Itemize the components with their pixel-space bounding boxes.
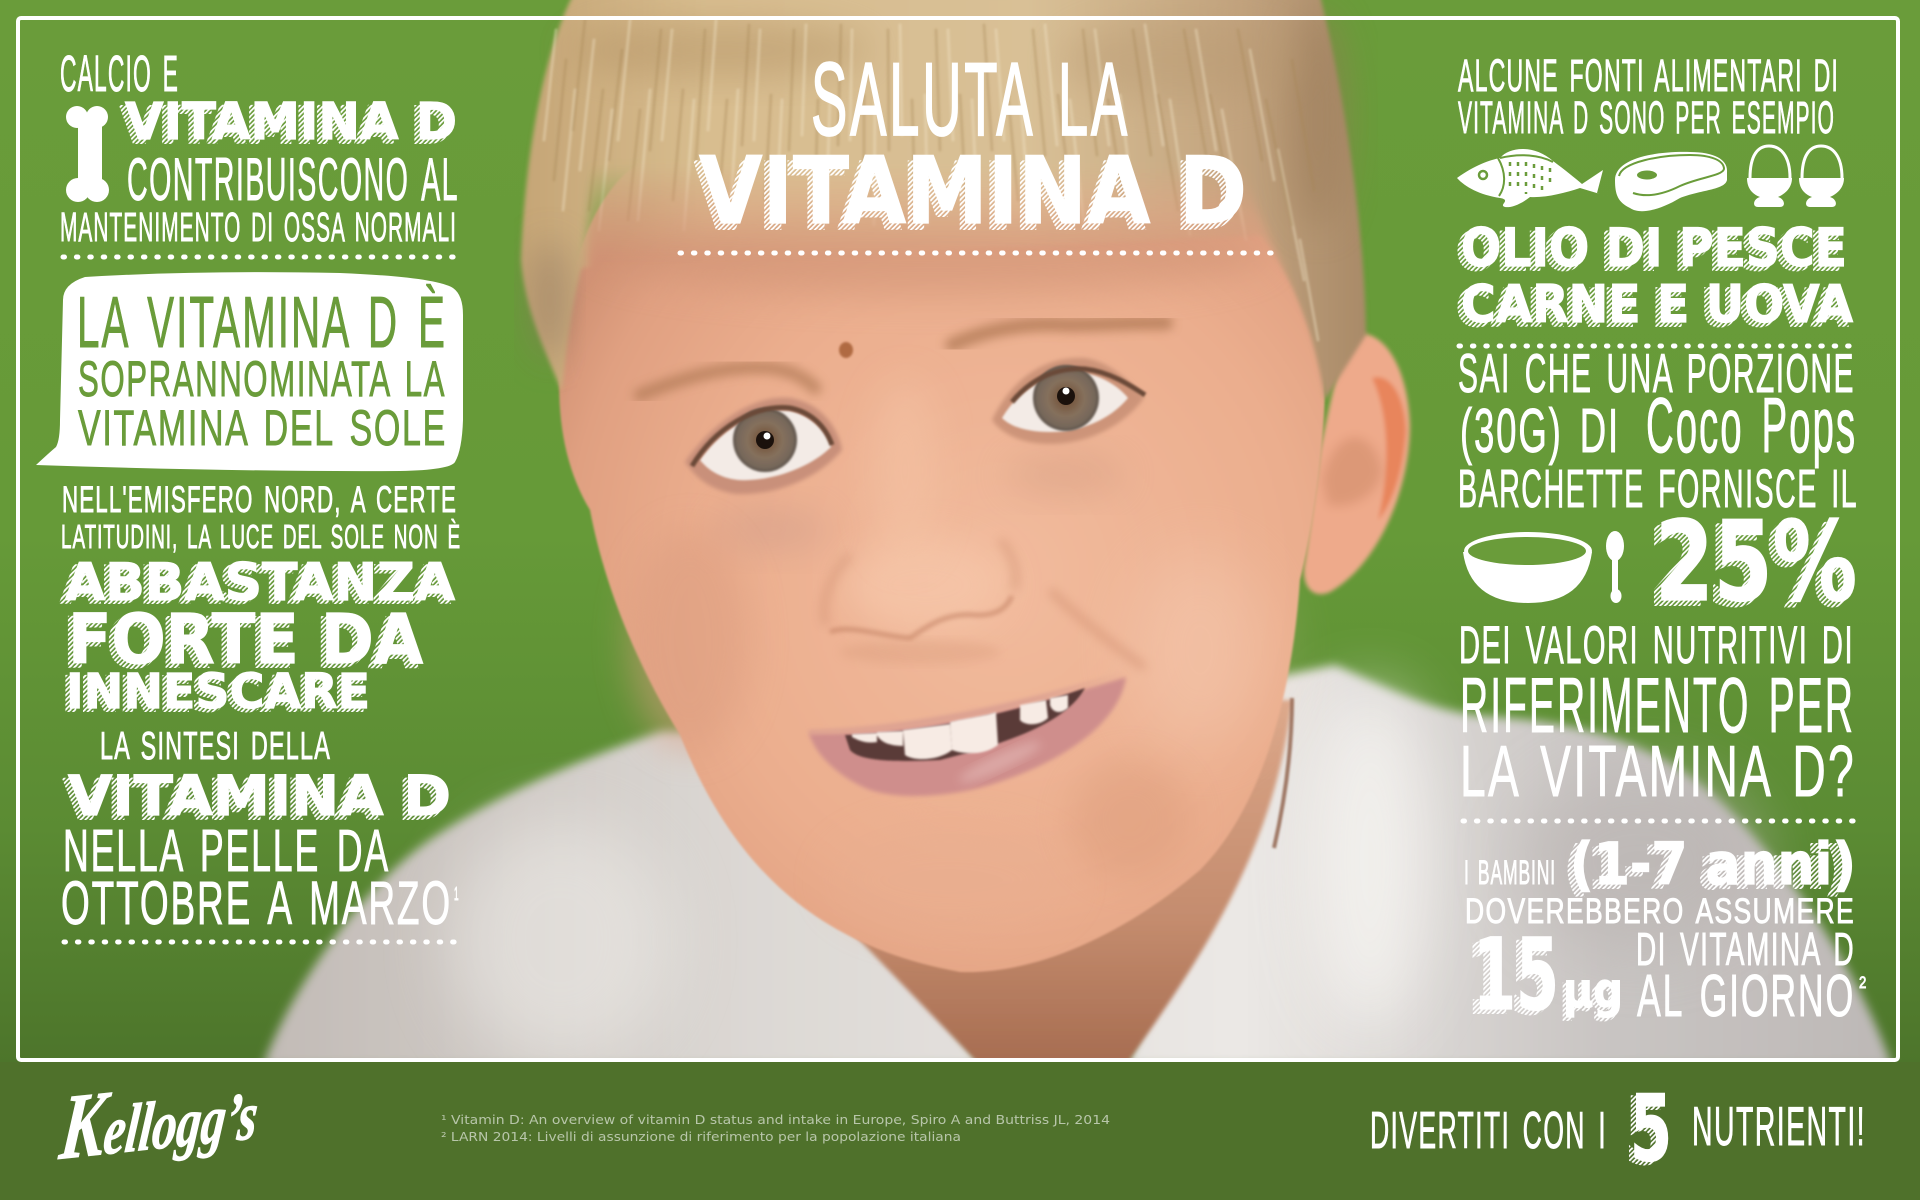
left column: northern hemisphere text: ABBASTANZA xyxy=(65,553,455,613)
text: CONTRIBUISCONO AL xyxy=(127,146,459,213)
heading: olio di pesce carne e uova xyxy=(1456,218,1853,339)
speech bubble xyxy=(36,272,463,471)
hair strands xyxy=(544,20,1318,340)
tagline: divertiti con i 5 nutrienti xyxy=(1370,1075,1866,1185)
right column: children intake text: 15 xyxy=(1466,922,1554,1037)
left column: northern hemisphere text: 1 xyxy=(454,884,459,904)
left column: northern hemisphere text: NELL'EMISFERO NORD, A CERTE xyxy=(62,479,457,520)
left column: bones text: CALCIO E xyxy=(60,45,179,102)
heading: olio di pesce carne e uova: OLIO DI PESCE xyxy=(1456,222,1842,283)
photo: face xyxy=(559,150,1325,972)
left column: bones text xyxy=(60,45,459,250)
photo: white t-shirt xyxy=(263,665,1892,1066)
left dotted divider 2 xyxy=(64,940,460,944)
title: saluta la vitamina d: VITAMINA D xyxy=(694,143,1242,251)
left column: northern hemisphere text: INNESCARE xyxy=(62,667,366,723)
left column: northern hemisphere text: NELLA PELLE DA xyxy=(63,818,390,884)
left column: northern hemisphere text: VITAMINA D xyxy=(63,768,446,832)
photo: right eyebrow xyxy=(952,323,1166,345)
icon: spoon xyxy=(1606,531,1624,603)
right dotted divider 2 xyxy=(1463,818,1856,824)
icon: eggs xyxy=(1747,146,1844,207)
photo: collar shadow line xyxy=(1274,698,1292,848)
footnotes: ¹ Vitamin D: An overview of vitamin D status and intake in Europe, Spiro A and Buttriss JL, 2014 xyxy=(441,1112,1110,1127)
photo: mouth xyxy=(809,672,1126,796)
heading: olio di pesce carne e uova: CARNE E UOVA xyxy=(1461,275,1853,335)
photo: hair xyxy=(521,0,1366,400)
speech bubble: LA VITAMINA D È xyxy=(77,283,447,363)
right dotted divider xyxy=(1459,344,1850,348)
left column: bones text: VITAMINA D xyxy=(120,97,452,156)
footnotes: ² LARN 2014: Livelli di assunzione di riferimento per la popolazione italiana xyxy=(441,1129,961,1144)
photo: left eye xyxy=(685,398,842,494)
lip highlight xyxy=(961,740,1039,784)
smile crease xyxy=(1050,590,1145,668)
speech bubble: VITAMINA DEL SOLE xyxy=(78,400,447,456)
right column: food sources text xyxy=(1458,50,1839,143)
left column: northern hemisphere text: VITAMINA D xyxy=(68,764,451,828)
photo: smiling blond boy xyxy=(263,0,1892,1066)
title: saluta la vitamina d: VITAMINA D xyxy=(699,137,1247,245)
photo: left eyebrow xyxy=(640,367,815,395)
left column: bones text: VITAMINA D xyxy=(125,93,457,152)
photo: mole xyxy=(839,342,853,358)
right column: children intake text: I BAMBINI xyxy=(1464,854,1556,892)
right column: children intake text: (1-7 anni) xyxy=(1570,830,1856,898)
right column: children intake text: 2 xyxy=(1859,973,1867,992)
footer band xyxy=(0,1062,1920,1200)
right column: coco pops text xyxy=(1458,342,1858,519)
left column: northern hemisphere text: OTTOBRE A MARZO xyxy=(61,869,452,937)
left column: northern hemisphere text: LA SINTESI DELLA xyxy=(100,725,331,768)
nose xyxy=(820,526,1020,660)
photo: neck xyxy=(845,700,1292,1066)
right column: children intake text: µg xyxy=(1560,966,1620,1022)
tagline: divertiti con i 5 nutrienti: DIVERTITI CON I xyxy=(1370,1102,1607,1160)
heading: olio di pesce carne e uova: OLIO DI PESCE xyxy=(1461,218,1847,279)
right column: children intake text xyxy=(1464,830,1867,1037)
tagline: divertiti con i 5 nutrienti: 5 xyxy=(1625,1078,1667,1185)
speech bubble: SOPRANNOMINATA LA xyxy=(78,351,446,407)
teeth xyxy=(852,695,1068,759)
icon: fish xyxy=(1457,149,1603,207)
stat: 25 percent: 25% xyxy=(1655,498,1857,627)
left column: northern hemisphere text: FORTE DA xyxy=(63,604,419,684)
footnotes xyxy=(441,1112,1110,1144)
heading: olio di pesce carne e uova: CARNE E UOVA xyxy=(1456,279,1848,339)
right column: children intake text: 15 xyxy=(1473,918,1559,1033)
photo: right eye xyxy=(992,358,1145,444)
face shading xyxy=(611,220,1300,860)
title dotted divider xyxy=(680,250,1276,256)
left column: northern hemisphere text: INNESCARE xyxy=(66,664,370,720)
left dotted divider xyxy=(63,254,457,260)
title: saluta la vitamina d: SALUTA LA xyxy=(811,42,1130,158)
icon: bowl xyxy=(1463,532,1592,603)
left column: northern hemisphere text: FORTE DA xyxy=(68,600,424,680)
tagline: divertiti con i 5 nutrienti: 5 xyxy=(1630,1075,1672,1182)
left column: bones text: MANTENIMENTO DI OSSA NORMALI xyxy=(60,204,457,250)
right column: children intake text: µg xyxy=(1563,963,1623,1019)
stat: 25 percent: 25% xyxy=(1648,503,1852,632)
left column: northern hemisphere text xyxy=(60,479,461,937)
title: saluta la vitamina d xyxy=(694,42,1247,251)
left column: northern hemisphere text: LATITUDINI, LA LUCE DEL SOLE NON È xyxy=(61,518,461,555)
right column: coco pops text: (30G) DI xyxy=(1460,397,1620,466)
left column: northern hemisphere text: ABBASTANZA xyxy=(60,556,450,616)
photo: right ear xyxy=(1304,333,1410,594)
right column: reference values text xyxy=(1459,616,1856,812)
icon: steak xyxy=(1615,152,1727,211)
right column: children intake text: (1-7 anni) xyxy=(1564,834,1848,902)
icon: bone xyxy=(66,106,109,202)
logo: kellogg's: Kellogg’s xyxy=(55,1056,264,1180)
